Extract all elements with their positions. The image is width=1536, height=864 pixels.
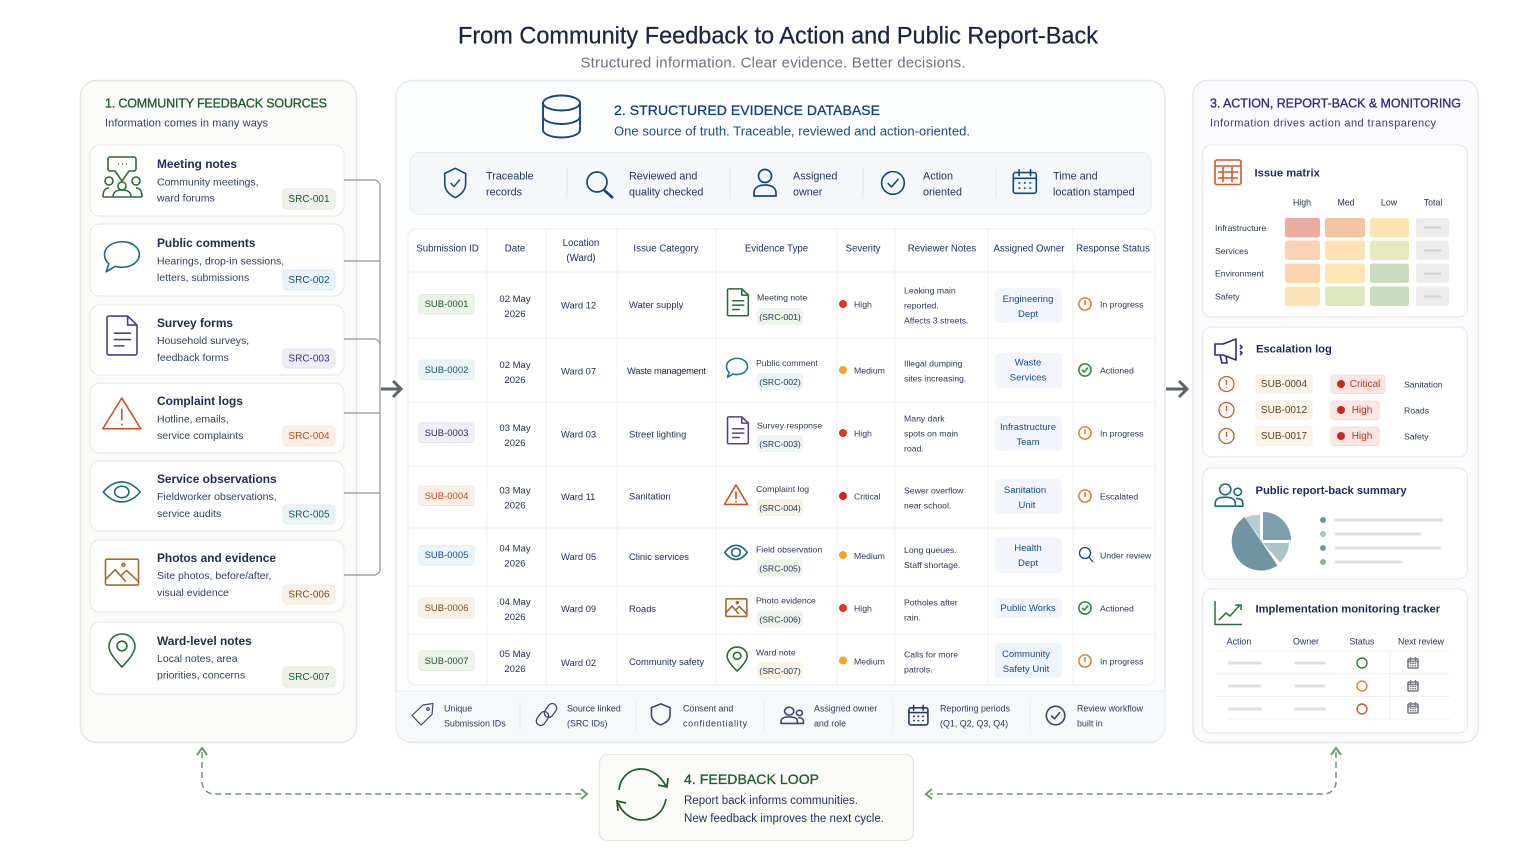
source card: public comments: Public comments	[157, 236, 256, 250]
evidence table	[408, 229, 1155, 685]
badge: SRC-002	[283, 270, 335, 290]
card: issue matrix	[1202, 145, 1468, 317]
row: SUB-0003	[419, 414, 1144, 454]
table header: Severity	[846, 244, 881, 255]
row: SUB-0003: (SRC-003)	[759, 439, 801, 449]
row: SUB-0005: Ward 05	[561, 551, 596, 562]
title: From Community Feedback to Action and Public Report-Back	[458, 23, 1099, 50]
row: SUB-0006: SUB-0006	[425, 603, 468, 614]
card: issue matrix: Low	[1381, 198, 1398, 208]
row: SUB-0007	[419, 643, 1144, 679]
card: public report-back summary: Public report-back summary	[1256, 485, 1407, 497]
table header: Location	[563, 238, 599, 249]
panel: community feedback sources	[80, 80, 356, 742]
row: SUB-0002: Illegal dumping	[904, 359, 963, 369]
icon: eye	[103, 482, 140, 502]
row: SUB-0003: High	[854, 429, 872, 439]
panel: feedback loop	[600, 754, 914, 840]
row: SUB-0007: Ward 02	[561, 657, 596, 668]
row: SUB-0001	[419, 286, 1144, 326]
source card: ward-level notes	[90, 622, 344, 694]
arrow: sources to database	[381, 381, 401, 397]
badge: SRC-002: SRC-002	[288, 275, 330, 286]
feature: reviewed and quality checked: Reviewed and	[629, 171, 697, 183]
source card: public comments: Hearings, drop-in sessions,	[157, 256, 284, 268]
icon: line chart	[1215, 601, 1242, 624]
row: SUB-0004: Critical	[854, 492, 881, 502]
row: SUB-0006: Public Works	[1000, 603, 1056, 614]
row: SUB-0007: SUB-0007	[425, 656, 468, 667]
badge: SRC-005	[283, 505, 335, 524]
row: SUB-0002: SUB-0002	[425, 365, 468, 376]
source card: public comments: letters, submissions	[157, 272, 249, 284]
row: SUB-0006	[419, 596, 1134, 628]
source card: service observations: Service observations	[157, 472, 277, 486]
feature: traceable records	[445, 168, 534, 199]
row: SUB-0002	[419, 353, 1134, 390]
row: SUB-0005: SUB-0005	[425, 550, 468, 561]
row: SUB-0003: In progress	[1100, 429, 1144, 439]
tracker header: Status	[1350, 637, 1375, 647]
badge: SRC-006	[283, 585, 335, 604]
feature: unique submission IDs	[412, 704, 506, 729]
row: SUB-0005	[419, 538, 1152, 576]
row: SUB-0003: Survey response	[757, 421, 822, 431]
badge: SRC-004: SRC-004	[288, 431, 330, 442]
arrow: feedback loop to sources	[197, 748, 587, 799]
row: SUB-0007: Ward note	[756, 648, 796, 658]
row: SUB-0007: Medium	[854, 657, 885, 667]
row: SUB-0004: Unit	[1019, 500, 1036, 511]
feature: review workflow	[1046, 704, 1144, 729]
card: escalation log	[1202, 327, 1468, 457]
row: SUB-0001: Engineering	[1003, 294, 1053, 305]
badge: SRC-005: SRC-005	[288, 510, 330, 521]
row: SUB-0002: 02 May	[499, 360, 531, 371]
heading: feedback loop: 4. FEEDBACK LOOP	[684, 771, 819, 787]
feature: traceable records: records	[486, 187, 523, 199]
row: SUB-0004: SUB-0004	[425, 491, 468, 502]
feature: action oriented	[882, 171, 962, 199]
badge: SRC-007: SRC-007	[288, 672, 330, 683]
row: SUB-0003: SUB-0003	[425, 428, 468, 439]
row: SUB-0003: spots on main	[904, 429, 958, 439]
subheading: action: Information drives action and transparency	[1210, 118, 1436, 130]
table header: Submission ID	[416, 244, 479, 255]
row: SUB-0002: Actioned	[1100, 366, 1134, 376]
badge: SRC-007	[283, 667, 335, 687]
row: SUB-0002: 2026	[504, 375, 526, 386]
row: SUB-0001: Leaking main	[904, 286, 956, 296]
row: SUB-0004: 03 May	[499, 486, 531, 497]
matrix row labels	[1215, 223, 1266, 302]
heading: database: 2. STRUCTURED EVIDENCE DATABASE	[614, 102, 880, 118]
row: SUB-0001: Water supply	[629, 299, 684, 310]
matrix row labels: Environment	[1215, 269, 1264, 279]
row: SUB-0003: Team	[1016, 437, 1040, 448]
source card: service observations	[90, 461, 344, 531]
source card: photos and evidence	[90, 540, 344, 612]
subheading: sources: Information comes in many ways	[105, 118, 268, 130]
row: SUB-0002: Waste	[1015, 358, 1041, 369]
row: SUB-0001: In progress	[1100, 300, 1144, 310]
feature: reviewed and quality checked	[587, 171, 703, 199]
icon: survey form	[107, 316, 137, 355]
escalation: SUB-0004: SUB-0004	[1261, 379, 1308, 390]
table header: Response Status	[1076, 244, 1150, 255]
source card: survey forms	[90, 305, 344, 375]
card: implementation monitoring tracker: Implementation monitoring tracker	[1256, 604, 1441, 616]
row: SUB-0007: Safety Unit	[1003, 664, 1050, 675]
escalation: SUB-0004: Critical	[1350, 379, 1380, 390]
row: SUB-0002: sites increasing.	[904, 374, 966, 384]
row: SUB-0006: 2026	[504, 612, 526, 623]
row: SUB-0005: Clinic services	[629, 551, 689, 562]
badge: SRC-001: SRC-001	[288, 194, 330, 205]
feature: consent and confidentiality	[651, 704, 748, 729]
row: SUB-0003: 03 May	[499, 423, 531, 434]
row: SUB-0006: rain.	[904, 613, 921, 623]
row: SUB-0004: Sewer overflow	[904, 486, 964, 496]
tracker rows	[1229, 658, 1418, 714]
feature: source linked: (SRC IDs)	[567, 719, 607, 729]
row: SUB-0004: Ward 11	[561, 491, 595, 502]
row: SUB-0002: Ward 07	[561, 366, 596, 377]
pie chart	[1232, 512, 1291, 571]
tracker header	[1227, 637, 1445, 647]
row: SUB-0001: High	[854, 300, 872, 310]
feature: source linked: Source linked	[567, 704, 621, 714]
row: SUB-0006: Roads	[629, 603, 656, 614]
feature: action oriented: Action	[923, 171, 953, 183]
row: SUB-0005: Long queues.	[904, 545, 957, 555]
card: issue matrix: High	[1293, 198, 1311, 208]
subheading: database: One source of truth. Traceable, reviewed and action-oriented.	[614, 124, 970, 139]
tracker header: Next review	[1398, 637, 1445, 647]
row: SUB-0005: Staff shortage.	[904, 560, 960, 570]
row: SUB-0003: Infrastructure	[1000, 422, 1056, 433]
source card: complaint logs: Complaint logs	[157, 394, 243, 408]
feature: assigned owner: Assigned	[793, 171, 837, 183]
escalation: SUB-0017: High	[1352, 431, 1372, 442]
row: SUB-0006: High	[854, 604, 872, 614]
source card: public comments	[90, 224, 344, 296]
row: SUB-0001: 2026	[504, 309, 526, 320]
row: SUB-0001: SUB-0001	[425, 299, 468, 310]
row: SUB-0005: Under review	[1100, 551, 1152, 561]
source card: ward-level notes: priorities, concerns	[157, 670, 245, 682]
badge: SRC-001	[283, 189, 335, 209]
subtitle: Structured information. Clear evidence. Better decisions.	[580, 55, 966, 72]
feature: unique submission IDs: Submission IDs	[444, 719, 506, 729]
feature: unique submission IDs: Unique	[444, 704, 472, 714]
source card: photos and evidence: Photos and evidence	[157, 551, 276, 565]
icon: cycle arrows	[617, 769, 668, 820]
source card: complaint logs: service complaints	[157, 430, 243, 442]
panel: action, report-back and monitoring	[1193, 80, 1478, 742]
row: SUB-0004: Sanitation	[629, 491, 671, 502]
feature: assigned owner and role	[781, 704, 877, 729]
source card: complaint logs	[90, 383, 344, 453]
escalation: SUB-0004: Sanitation	[1404, 380, 1443, 390]
escalation: SUB-0017: SUB-0017	[1261, 431, 1308, 442]
feature: review workflow: Review workflow	[1077, 704, 1144, 714]
icon: megaphone	[1215, 339, 1242, 363]
row: SUB-0001: (SRC-001)	[759, 312, 801, 322]
row: SUB-0001: Meeting note	[757, 293, 807, 303]
feature: time and location stamped	[1013, 170, 1135, 199]
feature: assigned owner and role: and role	[814, 719, 846, 729]
row: SUB-0007: 2026	[504, 664, 526, 675]
escalation: SUB-0017: Safety	[1404, 432, 1429, 442]
feature: reporting periods: Reporting periods	[940, 704, 1011, 714]
source card: service observations: service audits	[157, 508, 221, 520]
escalation: SUB-0017	[1219, 427, 1429, 446]
badge: SRC-003: SRC-003	[288, 354, 330, 365]
row: SUB-0002: Services	[1010, 373, 1046, 384]
feature: traceable records: Traceable	[486, 171, 534, 183]
badge: SRC-006: SRC-006	[288, 590, 330, 601]
row: SUB-0003: Street lighting	[629, 429, 686, 440]
row: SUB-0006: (SRC-006)	[759, 615, 801, 625]
row: SUB-0005: (SRC-005)	[759, 564, 801, 574]
card: escalation log: Escalation log	[1256, 344, 1332, 356]
feature: source linked	[535, 702, 621, 729]
row: SUB-0006: Photo evidence	[756, 596, 816, 606]
row: SUB-0007: Calls for more	[904, 650, 958, 660]
feature: assigned owner: owner	[793, 187, 823, 199]
row: SUB-0004: Complaint log	[756, 484, 809, 494]
matrix row labels: Services	[1215, 246, 1249, 256]
feature strip: governance	[396, 691, 1165, 742]
row: SUB-0003: 2026	[504, 438, 526, 449]
feature: assigned owner	[754, 170, 837, 199]
feature: time and location stamped: location stamped	[1053, 187, 1135, 199]
row: SUB-0006: Potholes after	[904, 598, 958, 608]
icon: table	[1215, 160, 1241, 184]
icon: people	[1215, 484, 1243, 506]
row: SUB-0004	[419, 479, 1138, 516]
source card: photos and evidence: Site photos, before/after,	[157, 570, 271, 582]
text: feedback loop description: Report back informs communities.	[684, 795, 858, 807]
row: SUB-0001: reported.	[904, 301, 939, 311]
row: SUB-0005: Health	[1014, 543, 1042, 554]
row: SUB-0002: Medium	[854, 366, 885, 376]
card: issue matrix: Med	[1337, 198, 1355, 208]
row: SUB-0001: Ward 12	[561, 300, 596, 311]
feature: consent and confidentiality: Consent and	[683, 704, 733, 714]
icon: image	[106, 559, 138, 585]
source card: survey forms: Household surveys,	[157, 335, 249, 347]
row: SUB-0005: Field observation	[756, 545, 822, 555]
heading: action: 3. ACTION, REPORT-BACK & MONITORING	[1210, 97, 1461, 111]
icon: speech bubble	[104, 242, 139, 272]
feature: consent and confidentiality: confidentiality	[683, 719, 748, 729]
pie legend placeholder lines	[1320, 517, 1442, 565]
arrow: action to feedback loop	[926, 748, 1341, 799]
row: SUB-0004: near school.	[904, 501, 951, 511]
row: SUB-0003: Ward 03	[561, 429, 596, 440]
row: SUB-0004: Escalated	[1100, 492, 1138, 502]
feature: reviewed and quality checked: quality checked	[629, 187, 703, 199]
card: implementation monitoring tracker	[1202, 589, 1468, 733]
source card: meeting notes: Meeting notes	[157, 157, 237, 171]
text: feedback loop description: New feedback improves the next cycle.	[684, 813, 884, 825]
row: SUB-0002: (SRC-002)	[759, 377, 801, 387]
table header: Issue Category	[633, 244, 699, 255]
row: SUB-0007: 05 May	[499, 649, 531, 660]
heading: sources: 1. COMMUNITY FEEDBACK SOURCES	[105, 97, 327, 111]
feature strip: principles	[410, 152, 1151, 214]
row: SUB-0007: Community safety	[629, 656, 704, 667]
row: SUB-0003: Many dark	[904, 414, 945, 424]
row: SUB-0006: Actioned	[1100, 604, 1134, 614]
source card: survey forms: Survey forms	[157, 316, 233, 330]
escalation: SUB-0004	[1219, 375, 1443, 394]
row: SUB-0007: In progress	[1100, 657, 1144, 667]
row: SUB-0004: (SRC-004)	[759, 503, 801, 513]
feature: review workflow: built in	[1077, 719, 1103, 729]
escalation: SUB-0012: High	[1352, 405, 1372, 416]
tracker header: Action	[1227, 637, 1251, 647]
table header: Evidence Type	[745, 244, 808, 255]
source card: meeting notes: ward forums	[156, 193, 215, 205]
escalation: SUB-0012: Roads	[1404, 406, 1430, 416]
source card: ward-level notes: Ward-level notes	[157, 634, 252, 648]
row: SUB-0002: Public comment	[756, 358, 818, 368]
row: SUB-0007: Community	[1002, 649, 1050, 660]
badge: SRC-003	[283, 349, 335, 368]
card: issue matrix: Total	[1424, 198, 1442, 208]
row: SUB-0006: Ward 09	[561, 603, 596, 614]
row: SUB-0006: 04 May	[499, 597, 531, 608]
source card: service observations: Fieldworker observations,	[157, 491, 277, 503]
source card: ward-level notes: Local notes, area	[157, 653, 238, 665]
arrow: database to action	[1166, 381, 1187, 397]
badge: SRC-004	[283, 426, 335, 446]
tracker header: Owner	[1293, 637, 1319, 647]
card: public report-back summary	[1202, 468, 1468, 579]
source card: survey forms: feedback forms	[157, 352, 229, 364]
feature: reporting periods	[909, 704, 1011, 729]
feature: assigned owner and role: Assigned owner	[814, 704, 877, 714]
icon: map pin	[109, 634, 135, 667]
row: SUB-0002: Waste management	[627, 365, 706, 376]
row: SUB-0001: Dept	[1018, 309, 1038, 320]
row: SUB-0001: Affects 3 streets.	[904, 316, 969, 326]
escalation: SUB-0012	[1219, 401, 1430, 420]
source card: photos and evidence: visual evidence	[157, 587, 229, 599]
icon: warning triangle	[103, 398, 141, 429]
row: SUB-0005: Dept	[1018, 558, 1038, 569]
feature: time and location stamped: Time and	[1053, 171, 1098, 183]
row: SUB-0004: Sanitation	[1004, 485, 1046, 496]
panel: structured evidence database	[396, 80, 1165, 742]
icon: meeting people	[103, 157, 142, 197]
matrix heat cells	[1285, 218, 1449, 306]
row: SUB-0005: Medium	[854, 551, 885, 561]
table header: (Ward)	[566, 253, 596, 264]
source card: meeting notes: Community meetings,	[157, 177, 259, 189]
text: feedback loop description	[684, 795, 884, 825]
table header: Date	[505, 244, 525, 255]
table header: Assigned Owner	[993, 244, 1065, 255]
escalation: SUB-0012: SUB-0012	[1261, 405, 1308, 416]
row: SUB-0007: patrols.	[904, 665, 932, 675]
matrix row labels: Infrastructure	[1215, 223, 1266, 233]
source card: complaint logs: Hotline, emails,	[157, 414, 229, 426]
feature: reporting periods: (Q1, Q2, Q3, Q4)	[940, 719, 1008, 729]
row: SUB-0005: 04 May	[499, 544, 531, 555]
feature: action oriented: oriented	[923, 187, 962, 199]
row: SUB-0003: road.	[904, 444, 924, 454]
connector: sources bracket	[344, 180, 380, 575]
icon: database	[543, 96, 580, 138]
table header: Reviewer Notes	[908, 244, 976, 255]
row: SUB-0007: (SRC-007)	[759, 666, 801, 676]
source card: meeting notes	[90, 145, 344, 216]
card: issue matrix: Issue matrix	[1254, 168, 1321, 180]
row: SUB-0005: 2026	[504, 559, 526, 570]
matrix row labels: Safety	[1215, 292, 1240, 302]
row: SUB-0004: 2026	[504, 501, 526, 512]
row: SUB-0001: 02 May	[499, 294, 531, 305]
table header	[416, 238, 1150, 264]
